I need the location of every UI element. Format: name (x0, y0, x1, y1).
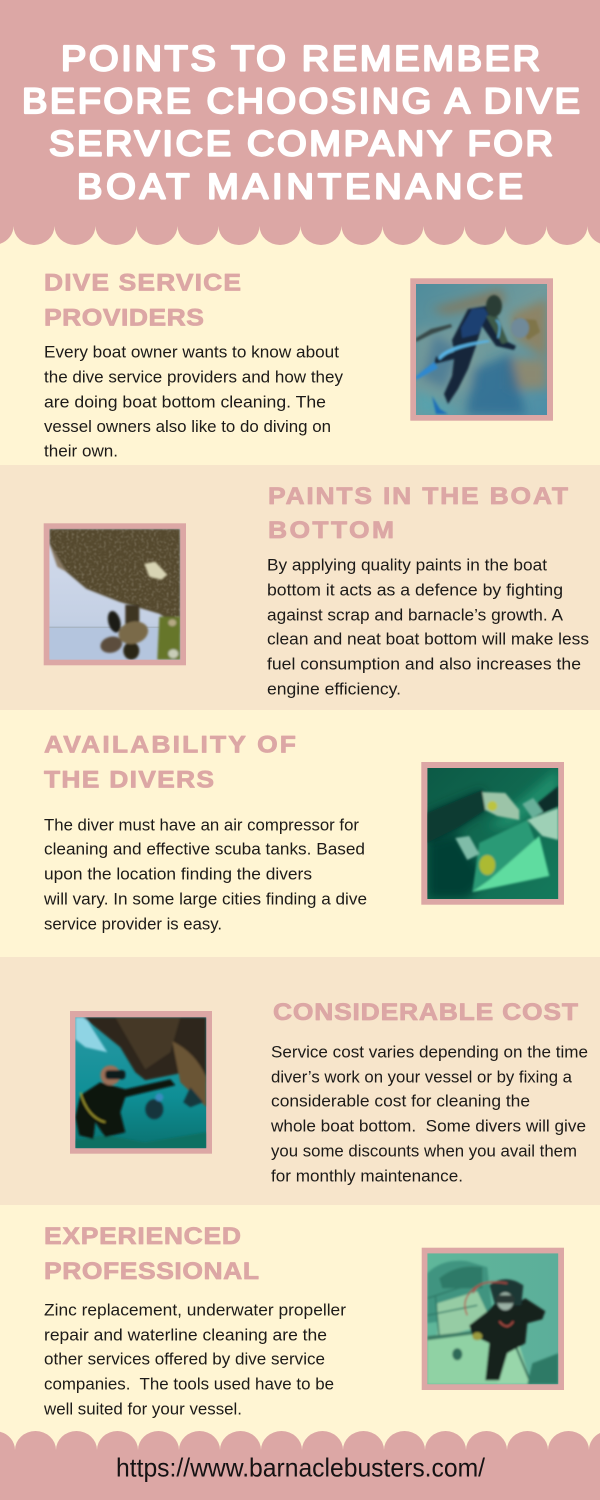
heading (44, 1223, 259, 1285)
body text (43, 816, 367, 934)
scalloped header shape (0, 0, 600, 245)
body text: companies. The tools used have to be (44, 1374, 334, 1394)
heading (268, 483, 568, 544)
title: BEFORE CHOOSING A DIVE (22, 81, 580, 121)
body text (267, 556, 589, 698)
body text (43, 1300, 346, 1419)
panel: considerable cost (0, 957, 600, 1205)
heading (44, 270, 241, 331)
body text: are doing boat bottom cleaning. The (44, 392, 326, 411)
body text: will vary. In some large cities finding a dive (43, 890, 367, 908)
body text: you some discounts when you avail them (271, 1142, 577, 1160)
body text: service provider is easy. (44, 914, 222, 934)
heading (44, 731, 296, 793)
body text: fuel consumption and also increases the (267, 654, 581, 674)
body text: bottom it acts as a defence by fighting (267, 580, 563, 600)
photo: propeller and fouled hull (44, 523, 186, 665)
heading: PROVIDERS (44, 305, 204, 331)
body text: whole boat bottom. Some divers will give (270, 1116, 586, 1136)
body text: other services offered by dive service (44, 1350, 325, 1368)
panel: availability of the divers (43, 731, 564, 934)
body text: their own. (44, 442, 118, 461)
body text: Every boat owner wants to know about (44, 343, 339, 362)
title (22, 39, 580, 206)
body text: considerable cost for cleaning the (271, 1092, 530, 1110)
footer banner (0, 1431, 600, 1500)
photo: diver hands and scuba tank (421, 762, 564, 905)
photo: diver at wreck (422, 1248, 564, 1390)
body text: By applying quality paints in the boat (267, 556, 547, 574)
body text: vessel owners also like to do diving on (44, 417, 331, 436)
scalloped footer shape (0, 1431, 600, 1500)
body text: engine efficiency. (267, 680, 401, 698)
body text: the dive service providers and how they (44, 368, 343, 387)
body text: upon the location finding the divers (44, 864, 312, 884)
body text: Service cost varies depending on the time (271, 1042, 588, 1062)
heading: BOTTOM (268, 517, 394, 544)
body text: repair and waterline cleaning are the (44, 1326, 327, 1344)
body text: cleaning and effective scuba tanks. Based (44, 840, 365, 858)
section band (0, 957, 600, 1205)
heading: CONSIDERABLE COST (273, 999, 578, 1026)
body text: clean and neat boat bottom will make less (267, 630, 589, 648)
body text: against scrap and barnacle’s growth. A (267, 606, 564, 624)
header banner (0, 0, 600, 245)
title: POINTS TO REMEMBER (61, 39, 540, 78)
panel: paints in the boat bottom (0, 465, 600, 710)
title: SERVICE COMPANY FOR (49, 124, 553, 163)
body text (270, 1042, 588, 1186)
heading: EXPERIENCED (44, 1223, 241, 1250)
body text: well suited for your vessel. (43, 1400, 242, 1419)
body text: The diver must have an air compressor for (44, 816, 359, 834)
panel: dive service providers (44, 270, 553, 461)
body text: for monthly maintenance. (271, 1166, 463, 1186)
heading: THE DIVERS (44, 766, 214, 793)
heading: AVAILABILITY OF (44, 731, 296, 758)
body text (44, 343, 343, 461)
photo: diver under hull (70, 1011, 212, 1154)
body text: Zinc replacement, underwater propeller (44, 1300, 346, 1320)
website url: https://www.barnaclebusters.com/ (116, 1453, 486, 1483)
heading: PROFESSIONAL (44, 1258, 259, 1285)
section band (0, 465, 600, 710)
heading: DIVE SERVICE (44, 270, 241, 296)
heading: PAINTS IN THE BOAT (268, 483, 568, 510)
panel: experienced professional (43, 1223, 564, 1419)
photo: diver cleaning hull (410, 278, 553, 421)
title: BOAT MAINTENANCE (77, 167, 523, 206)
body text: diver’s work on your vessel or by fixing a (271, 1068, 573, 1086)
